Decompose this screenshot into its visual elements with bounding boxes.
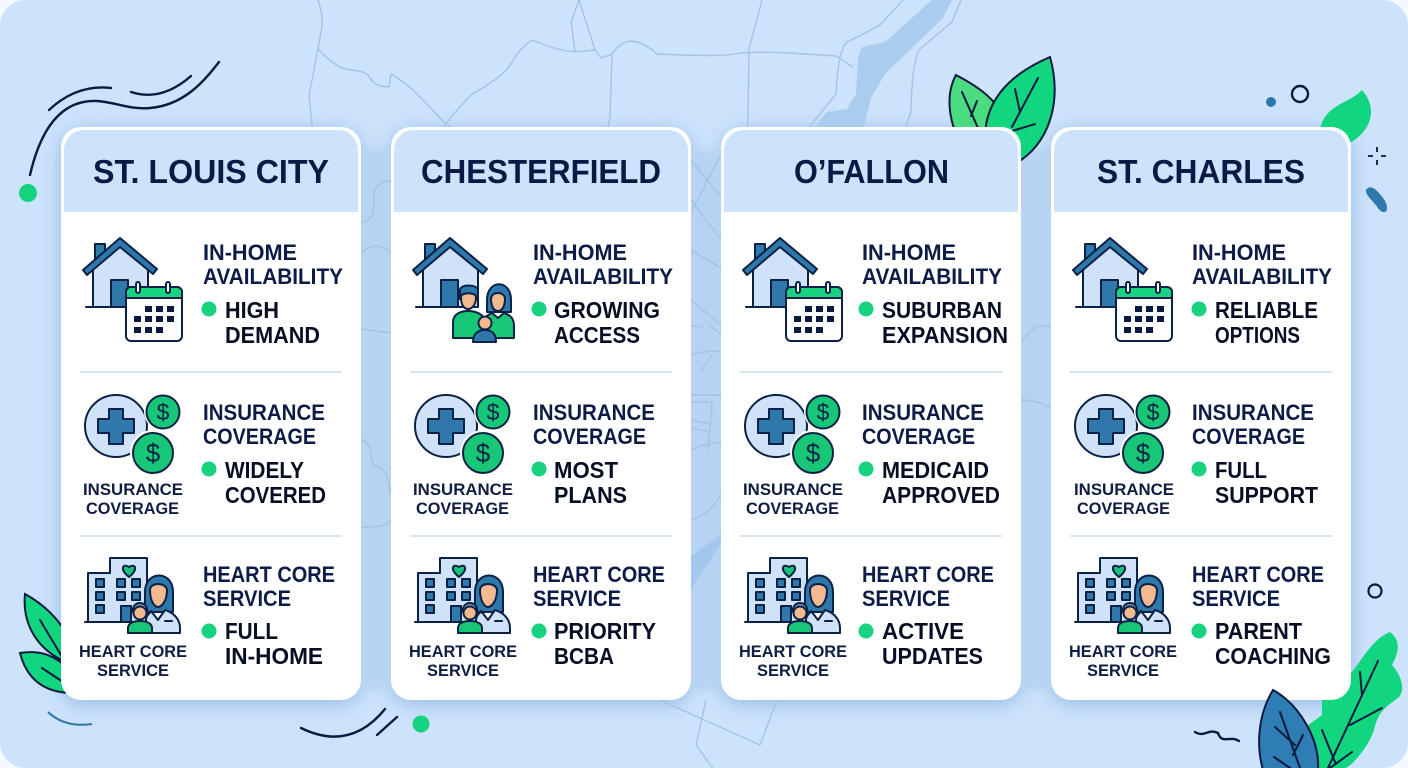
text: heart core service: HEART CORE	[203, 562, 335, 587]
icon: insurance cross and coins	[413, 393, 513, 518]
icon: insurance cross and coins	[83, 393, 183, 518]
text: heart core service: HEART CORE	[533, 562, 665, 587]
icon: clinic with clinician and child	[409, 558, 517, 680]
text: insurance coverage	[1192, 400, 1318, 508]
text: in-home availability: AVAILABILITY	[1192, 264, 1332, 289]
text: insurance coverage	[532, 400, 655, 508]
header: St. Louis City	[64, 130, 358, 212]
icon: insurance cross and coins: INSURANCE	[1074, 480, 1174, 499]
text: in-home availability	[202, 240, 343, 348]
text: heart core service: PARENT	[1215, 618, 1302, 644]
icon: insurance cross and coins: $	[817, 399, 830, 425]
text: insurance coverage: PLANS	[554, 482, 627, 508]
header: St. Charles	[1054, 130, 1348, 212]
text: insurance coverage	[858, 400, 1000, 508]
text: in-home availability: ACCESS	[554, 322, 640, 348]
text: insurance coverage: SUPPORT	[1215, 482, 1318, 508]
icon: clinic with clinician and child: SERVICE	[1087, 661, 1159, 680]
panel: O'Fallon	[721, 127, 1021, 700]
icon: insurance cross and coins: COVERAGE	[746, 499, 839, 518]
text: heart core service	[858, 562, 994, 669]
text: heart core service: FULL	[225, 618, 278, 644]
icon: house and calendar	[83, 238, 182, 341]
icon: insurance cross and coins: COVERAGE	[86, 499, 179, 518]
icon: clinic with clinician and child: HEART CORE	[79, 642, 187, 661]
icon: large green leaf	[986, 57, 1055, 160]
panel: St. Louis City	[61, 127, 361, 700]
text: in-home availability: IN-HOME	[203, 240, 297, 265]
icon: insurance cross and coins: INSURANCE	[83, 480, 183, 499]
icon: insurance cross and coins: $	[476, 438, 491, 468]
icon: insurance cross and coins: COVERAGE	[416, 499, 509, 518]
icon: clinic with clinician and child: SERVICE	[427, 661, 499, 680]
text: insurance coverage: INSURANCE	[862, 400, 984, 425]
decorative: right-side marks	[1195, 86, 1387, 741]
icon: lobed green leaf bottom right	[1300, 632, 1402, 768]
text: heart core service: SERVICE	[1192, 586, 1280, 611]
text: insurance coverage	[202, 400, 326, 508]
text: in-home availability: DEMAND	[225, 322, 320, 348]
decorative: plain green leaf top right	[1321, 90, 1371, 143]
text: in-home availability: GROWING	[554, 297, 660, 323]
icon: clinic with clinician and child: HEART CORE	[739, 642, 847, 661]
text: in-home availability: OPTIONS	[1215, 322, 1300, 348]
text: heart core service: UPDATES	[882, 643, 983, 669]
text: in-home availability	[532, 240, 673, 348]
text: heart core service: HEART CORE	[862, 562, 994, 587]
text: insurance coverage: COVERAGE	[203, 424, 316, 449]
icon: clinic with clinician and child	[1069, 558, 1177, 680]
text: in-home availability: EXPANSION	[882, 322, 1008, 348]
icon: clinic with clinician and child: SERVICE	[757, 661, 829, 680]
text: insurance coverage: INSURANCE	[533, 400, 655, 425]
icon: insurance cross and coins: $	[1147, 399, 1160, 425]
icon: small green leaf	[950, 75, 1000, 150]
icon: insurance cross and coins: COVERAGE	[1077, 499, 1170, 518]
text: in-home availability: AVAILABILITY	[203, 264, 343, 289]
text: heart core service: SERVICE	[533, 586, 621, 611]
map: roads and river	[300, 0, 1051, 768]
heading: St. Charles: ST. CHARLES	[1097, 153, 1305, 190]
decorative: top left curves	[19, 62, 219, 202]
text: insurance coverage: INSURANCE	[1192, 400, 1314, 425]
icon: house and family	[413, 238, 514, 342]
text: in-home availability: IN-HOME	[533, 240, 627, 265]
text: heart core service: COACHING	[1215, 643, 1331, 669]
heading: Chesterfield: CHESTERFIELD	[421, 153, 661, 190]
icon: insurance cross and coins: INSURANCE	[743, 480, 843, 499]
heading: O'Fallon: O’FALLON	[794, 153, 949, 190]
text: in-home availability: IN-HOME	[862, 240, 956, 265]
text: in-home availability: AVAILABILITY	[862, 264, 1002, 289]
decorative: bottom left leaves	[20, 594, 70, 693]
icon: clinic with clinician and child	[79, 558, 187, 680]
text: heart core service: ACTIVE	[882, 618, 964, 644]
icon: insurance cross and coins: $	[806, 438, 821, 468]
icon: clinic with clinician and child: SERVICE	[97, 661, 169, 680]
icon: insurance cross and coins: $	[157, 399, 170, 425]
icon: clinic with clinician and child: HEART CORE	[409, 642, 517, 661]
icon: insurance cross and coins: $	[146, 438, 161, 468]
text: heart core service: SERVICE	[203, 586, 291, 611]
heading: St. Louis City: ST. LOUIS CITY	[93, 153, 329, 190]
icon: clinic with clinician and child: HEART CORE	[1069, 642, 1177, 661]
icon: house and calendar	[743, 238, 842, 341]
decorative: top leaves	[950, 57, 1055, 160]
text: in-home availability	[1192, 240, 1332, 348]
text: insurance coverage: COVERAGE	[1192, 424, 1305, 449]
text: insurance coverage: COVERED	[225, 482, 326, 508]
text: insurance coverage: COVERAGE	[862, 424, 975, 449]
icon: insurance cross and coins: INSURANCE	[413, 480, 513, 499]
text: in-home availability: HIGH	[225, 297, 279, 323]
text: heart core service	[202, 562, 335, 669]
icon: house and calendar	[1073, 238, 1172, 341]
icon: blue leaf in front of St. Charles card	[1259, 690, 1318, 768]
icon: insurance cross and coins: $	[1136, 438, 1151, 468]
icon: insurance cross and coins	[743, 393, 843, 518]
text: insurance coverage: MEDICAID	[882, 457, 989, 483]
text: heart core service	[532, 562, 665, 669]
text: insurance coverage: FULL	[1215, 457, 1267, 483]
icon: clinic with clinician and child	[739, 558, 847, 680]
text: insurance coverage: MOST	[554, 457, 618, 483]
text: heart core service: SERVICE	[862, 586, 950, 611]
text: heart core service: IN-HOME	[225, 643, 323, 669]
panel: St. Charles	[1051, 127, 1351, 700]
text: in-home availability	[858, 240, 1008, 348]
text: in-home availability: RELIABLE	[1215, 297, 1318, 323]
decorative: bottom curves	[48, 709, 430, 737]
icon: insurance cross and coins: $	[487, 399, 500, 425]
text: insurance coverage: COVERAGE	[533, 424, 646, 449]
text: heart core service: BCBA	[554, 643, 614, 669]
panel: Chesterfield	[391, 127, 691, 700]
header: Chesterfield	[394, 130, 688, 212]
card shadows	[61, 131, 1351, 704]
gap tint between cards	[356, 150, 1056, 690]
text: heart core service: PRIORITY	[554, 618, 656, 644]
text: insurance coverage: APPROVED	[882, 482, 1000, 508]
text: insurance coverage: INSURANCE	[203, 400, 325, 425]
text: in-home availability: IN-HOME	[1192, 240, 1286, 265]
text: in-home availability: AVAILABILITY	[533, 264, 673, 289]
icon: insurance cross and coins	[1074, 393, 1174, 518]
text: in-home availability: SUBURBAN	[882, 297, 1002, 323]
text: heart core service: HEART CORE	[1192, 562, 1324, 587]
header: O'Fallon	[724, 130, 1018, 212]
text: insurance coverage: WIDELY	[225, 457, 304, 483]
text: heart core service	[1192, 562, 1331, 669]
